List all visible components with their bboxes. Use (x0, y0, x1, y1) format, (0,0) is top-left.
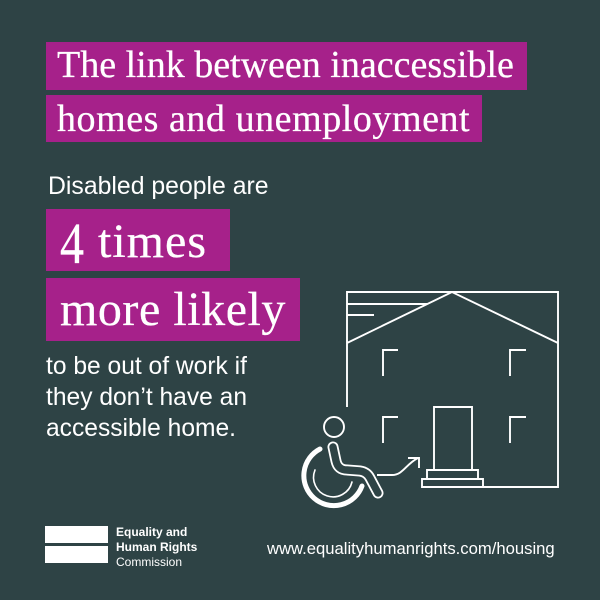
body text: accessible home. (46, 415, 236, 442)
logo text: Human Rights (116, 540, 197, 554)
icon: house (347, 292, 558, 487)
highlight: 4 times: times (98, 215, 207, 268)
highlight: more likely: more likely (60, 283, 286, 336)
body text: to be out of work if (46, 353, 247, 380)
title line 1: The link between inaccessible (57, 44, 514, 86)
logo: Equality and Human Rights Commission (45, 525, 197, 569)
logo bars (45, 526, 108, 563)
highlight: 4 times (46, 209, 230, 271)
arrow (377, 458, 419, 475)
highlight: 4 times: 4 (60, 212, 85, 277)
website url: www.equalityhumanrights.com/housing (267, 539, 555, 558)
intro text: Disabled people are (48, 173, 269, 200)
body text (46, 353, 247, 442)
logo text: Equality and (116, 525, 187, 539)
icon: wheelchair user (304, 417, 378, 506)
title line 2: homes and unemployment (57, 98, 470, 140)
logo text: Commission (116, 555, 182, 569)
body text: they don’t have an (46, 384, 247, 411)
logo text (116, 525, 197, 569)
